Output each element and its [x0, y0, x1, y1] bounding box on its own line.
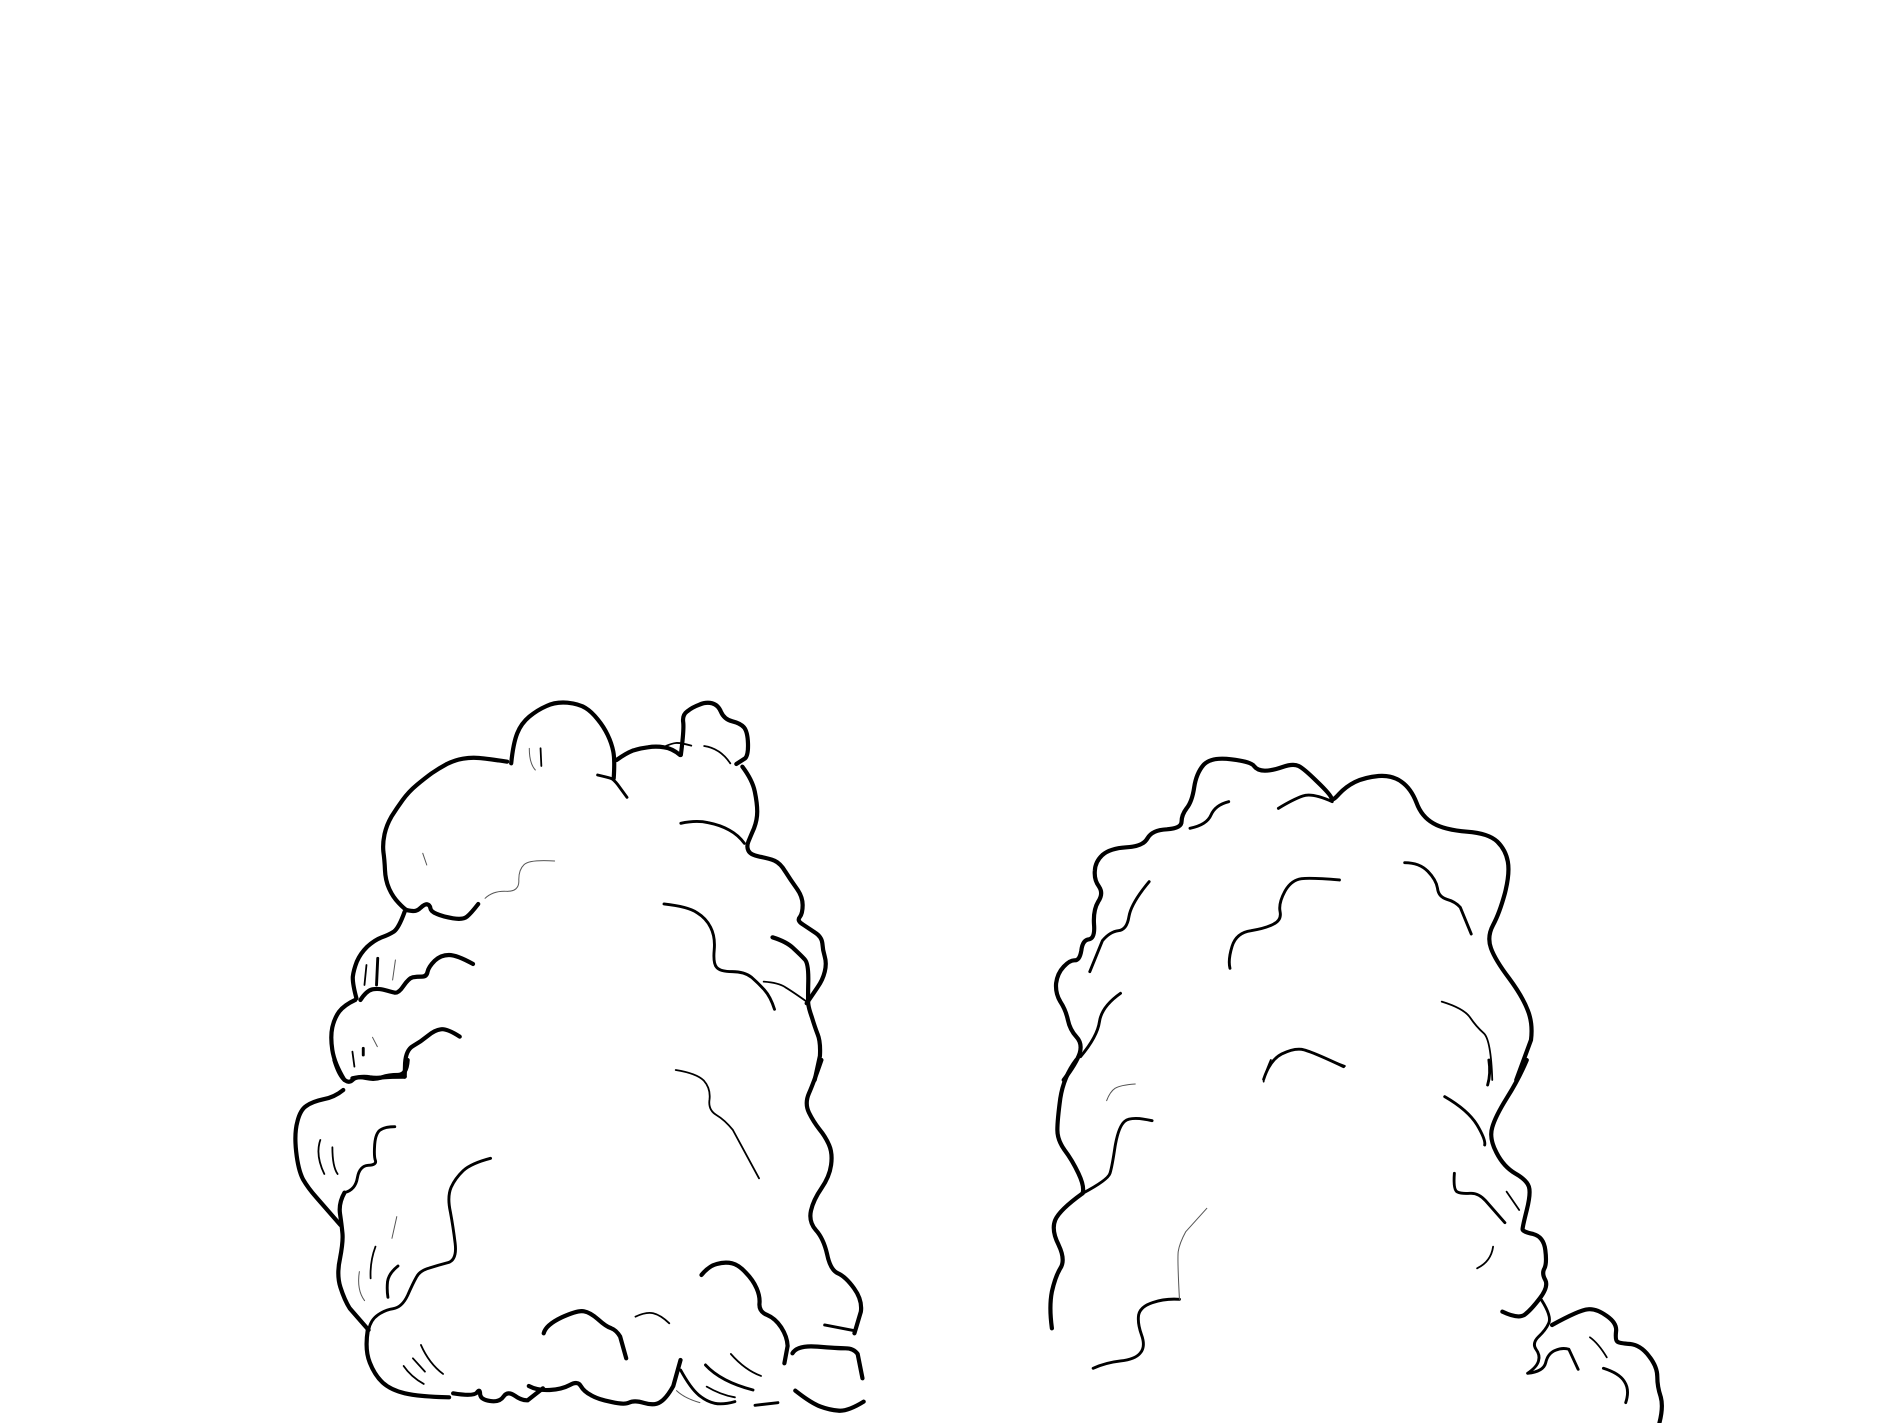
- left cloud upper part: [331, 702, 826, 1080]
- left cloud: [295, 702, 864, 1411]
- right cloud lower part: [1050, 1060, 1662, 1423]
- left cloud lower part: [295, 1060, 864, 1411]
- right cloud: [1050, 759, 1662, 1423]
- right cloud upper part: [1056, 759, 1532, 1080]
